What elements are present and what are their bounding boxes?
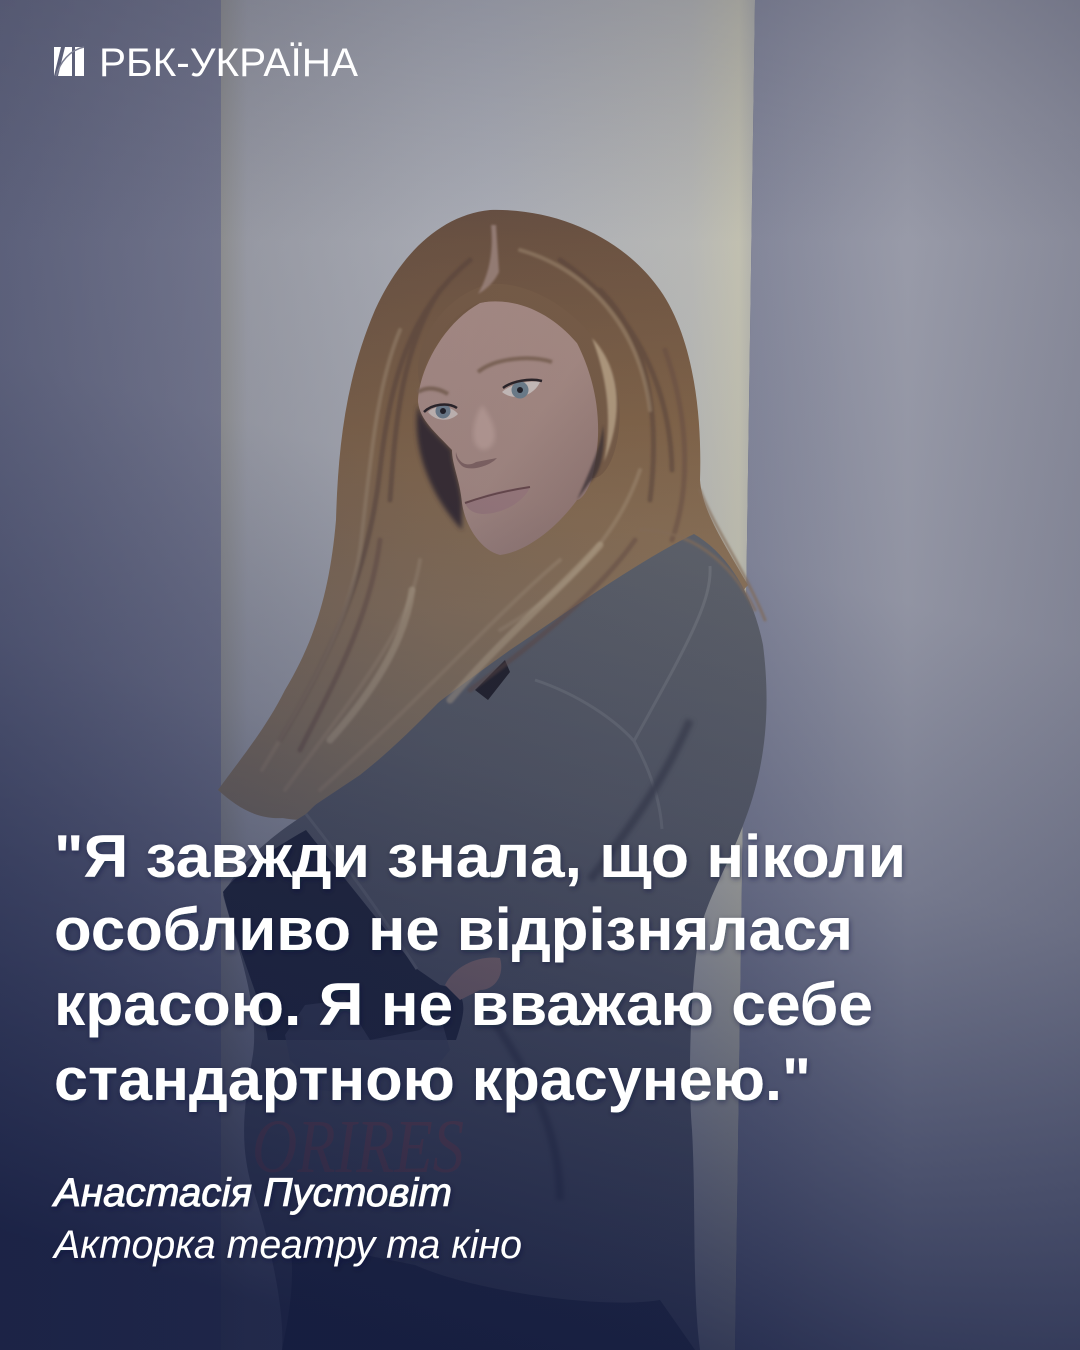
face	[418, 301, 603, 555]
fringe over face	[418, 284, 620, 478]
quote: стандартною красунею."	[54, 1046, 811, 1113]
jaw shadow	[577, 425, 604, 500]
lips	[465, 487, 530, 514]
neckline	[475, 660, 510, 700]
sweater body	[223, 534, 767, 1350]
photo: woman portrait	[218, 210, 767, 1350]
icon: logo mark	[54, 47, 84, 76]
quote	[54, 823, 906, 1113]
quote: красою. Я не вважаю себе	[54, 971, 873, 1038]
sweater print text: ORIRES	[252, 1105, 464, 1189]
quote: особливо не відрізнялася	[54, 896, 853, 963]
quote: "Я завжди знала, що ніколи	[54, 823, 906, 890]
attribution: Анастасія Пустовіт	[52, 1171, 452, 1215]
nose	[456, 452, 497, 468]
sweater lower shadow / pants	[282, 1240, 695, 1350]
hair back mass	[218, 210, 748, 820]
dark undershirt	[223, 830, 463, 1040]
print on undershirt	[285, 1000, 450, 1100]
hand	[445, 957, 501, 1000]
logo wordmark: РБК-УКРАЇНА	[99, 41, 358, 85]
hair front over sweater	[218, 450, 640, 818]
eyes and brows	[418, 358, 552, 420]
blonde streak	[592, 338, 617, 462]
attribution: Акторка театру та кіно	[52, 1223, 522, 1267]
hair part	[478, 225, 499, 294]
sweater arm folds	[306, 566, 710, 969]
attribution	[52, 1171, 522, 1267]
hair strands	[262, 250, 765, 790]
logo	[54, 41, 358, 85]
shadow behind face	[417, 405, 462, 530]
